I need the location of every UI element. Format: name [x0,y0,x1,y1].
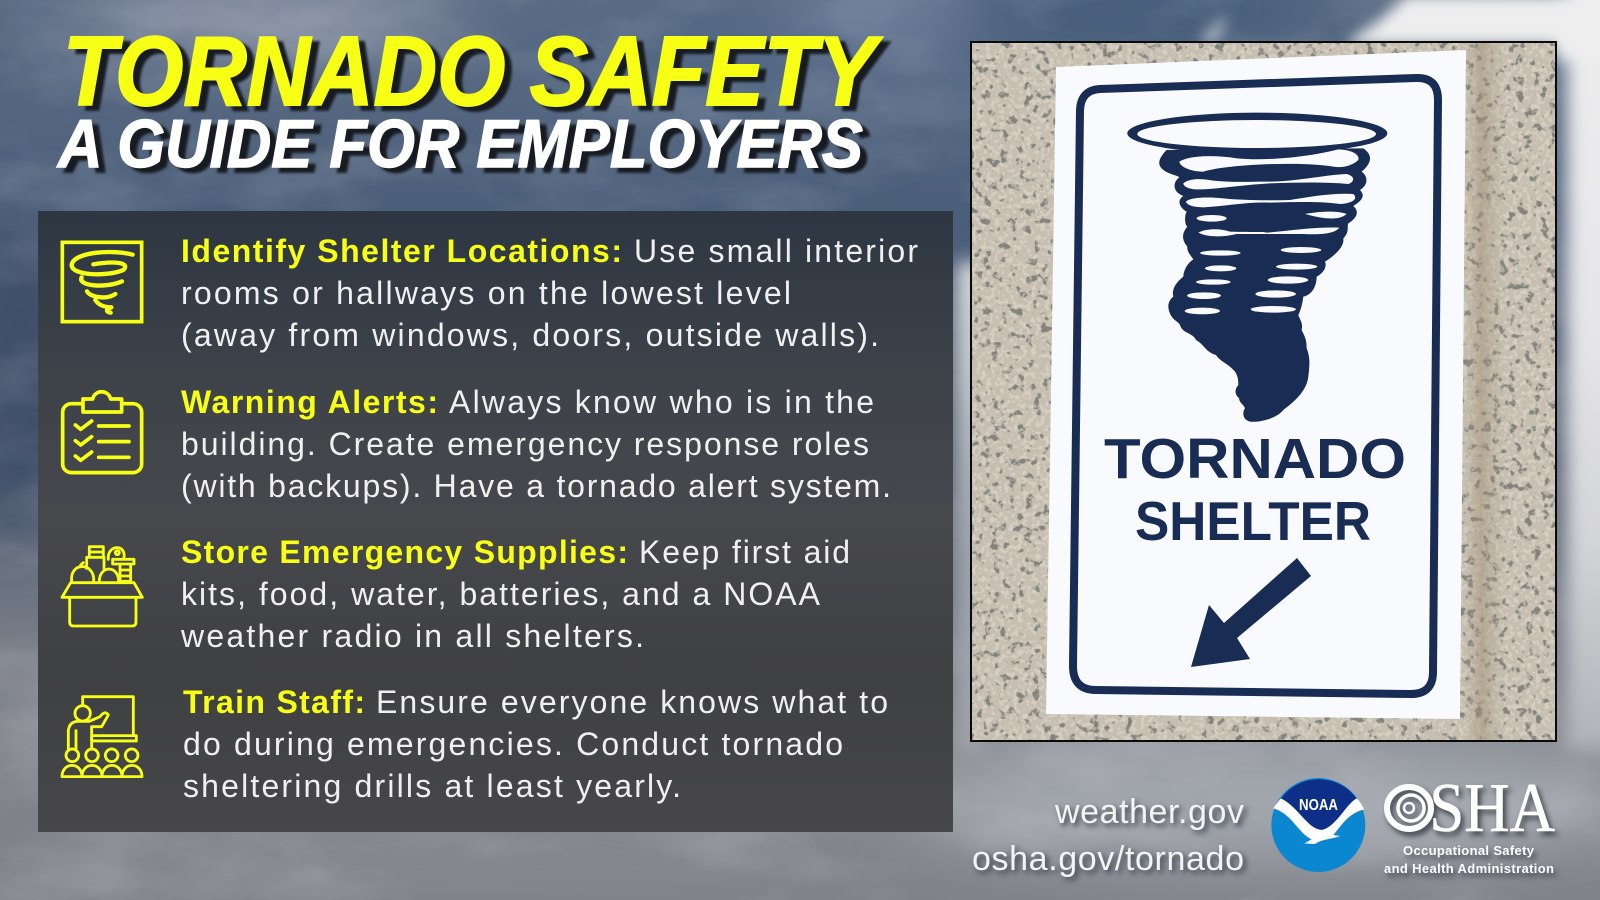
text: train staff: Train Staff: [183,684,365,720]
logo: OSHA: OSHA [1384,770,1555,847]
sign board [1046,50,1466,719]
text: store emergency supplies: kits, food, water, batteries, and a NOAA [181,576,821,612]
logo: NOAA: NOAA [1299,797,1338,814]
text: identify shelter locations [181,233,918,353]
footer links [972,793,1244,878]
photo: tornado shelter sign on concrete wall [971,42,1556,741]
icon: trainer and audience [62,697,142,777]
text: warning alerts: (with backups). Have a tornado alert system. [181,468,891,504]
text: identify shelter locations: Use small interior [634,233,918,269]
text: identify shelter locations: (away from windows, doors, outside walls). [181,317,879,353]
tornado graphic [1127,113,1387,422]
footer links: osha.gov/tornado [972,840,1244,878]
title [56,16,883,182]
text: identify shelter locations: Identify Shelter Locations: [181,233,622,269]
text: store emergency supplies: Keep first aid [639,534,850,570]
text: warning alerts: Warning Alerts: [181,384,438,420]
text: store emergency supplies [180,534,850,654]
text: train staff: do during emergencies. Conduct tornado [183,726,843,762]
text: identify shelter locations: rooms or hallways on the lowest level [181,275,791,311]
text: store emergency supplies: Store Emergency Supplies: [181,534,628,570]
sign border [1073,78,1438,694]
text: train staff: Ensure everyone knows what to [376,684,888,720]
logo: OSHA: and Health Administration [1384,861,1554,876]
sign arrow [1191,558,1311,667]
logo: OSHA [1384,770,1555,876]
footer links: weather.gov [1054,793,1244,831]
subtitle: A Guide for Employers: A GUIDE FOR EMPLOYERS [56,106,863,182]
photo frame [971,42,1556,741]
text: warning alerts: Always know who is in the [449,384,874,420]
sign text: Tornado Shelter: TORNADO [1104,427,1406,491]
panel: safety steps [38,211,953,832]
text: warning alerts [181,384,891,504]
logo: OSHA: Occupational Safety [1403,843,1535,858]
text: store emergency supplies: weather radio in all shelters. [180,618,644,654]
OSHA swirl rings [1387,787,1431,829]
icon: tornado in square [62,242,142,322]
text: warning alerts: building. Create emergency response roles [181,426,869,462]
icon: clipboard checklist [63,392,142,473]
text: train staff: sheltering drills at least yearly. [183,768,681,804]
sign text: Tornado Shelter: SHELTER [1135,490,1371,552]
sign text: Tornado Shelter [1104,427,1406,552]
text: train staff [183,684,888,804]
title line: Tornado Safety: TORNADO SAFETY [63,16,883,126]
logo: NOAA [1271,778,1365,872]
icon: box of supplies [62,547,142,626]
